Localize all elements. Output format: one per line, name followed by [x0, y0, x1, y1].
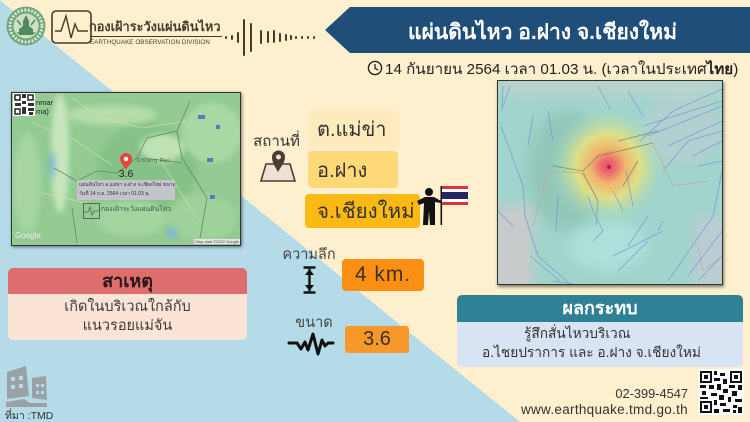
map pin [120, 153, 132, 170]
icon: sound wave [225, 19, 315, 56]
location: subdistrict [308, 110, 399, 147]
intensity map [498, 81, 722, 284]
map terrain [12, 93, 240, 245]
location: subdistrict: ต.แม่ข่า [317, 118, 387, 140]
icon: department seal [6, 6, 46, 46]
map label [36, 98, 53, 116]
source label: ที่มา :TMD [5, 410, 53, 422]
map credit: Map data ©2022 Google [195, 239, 239, 244]
icon: depth arrows [304, 266, 316, 294]
panel: cause [8, 268, 247, 340]
place label: Chiang Rai [137, 158, 169, 164]
icon: seismic wave [288, 332, 334, 356]
magnitude label: 3.6 [119, 168, 133, 180]
location label [253, 130, 300, 182]
logo subtitle [90, 36, 222, 46]
impact text: อ.ไชยปราการ และ อ.ฝาง จ.เชียงใหม่ [482, 345, 701, 360]
title banner [325, 7, 750, 53]
cause text: เกิดในบริเวณใกล้กับ [64, 299, 191, 315]
impact heading: ผลกระทบ [562, 298, 638, 318]
location text: สถานที่ [253, 133, 300, 150]
impact text [482, 324, 701, 360]
map watermark [83, 203, 171, 219]
location: district: อ.ฝาง [317, 160, 367, 182]
icon: clock [368, 60, 382, 76]
logo subtitle: EARTHQUAKE OBSERVATION DIVISION [90, 39, 210, 46]
impact map [497, 80, 723, 285]
depth value: 4 km. [355, 263, 411, 286]
magnitude label: ขนาด [295, 315, 333, 331]
date line [368, 60, 738, 78]
cause heading: สาเหตุ [102, 271, 153, 291]
title: แผ่นดินไหว อ.ฝาง จ.เชียงใหม่ [408, 21, 677, 44]
icon: map pin [260, 150, 296, 182]
map caption: วันที่ 14 ก.ย. 2564 เวลา 01.03 น. [79, 191, 150, 197]
panel: impact [457, 295, 743, 367]
impact heading [457, 295, 743, 322]
magnitude value: 3.6 [363, 328, 391, 350]
location: province [305, 194, 420, 228]
magnitude value [345, 326, 409, 353]
header logo block [6, 6, 315, 56]
cause heading [8, 268, 247, 294]
location: province: จ.เชียงใหม่ [317, 200, 415, 222]
map caption [77, 180, 175, 200]
logo title: กองเฝ้าระวังแผ่นดินไหว [89, 19, 221, 34]
cause text [64, 298, 191, 334]
map qr [13, 93, 35, 116]
map label: ma) [36, 107, 49, 116]
map label: nmar [36, 98, 53, 107]
watermark logo [83, 203, 100, 219]
contact website: www.earthquake.tmd.go.th [521, 402, 688, 417]
icon: seismograph logo [51, 10, 92, 44]
depth value [342, 259, 424, 291]
icon: person with Thai flag [417, 186, 468, 225]
location: district [308, 151, 398, 188]
icon: collapsed building [6, 366, 47, 407]
QR code [698, 369, 744, 415]
contact phone: 02-399-4547 [615, 386, 688, 401]
date text: 14 กันยายน 2564 เวลา 01.03 น. (เวลาในประเทศไทย) [385, 61, 738, 78]
watermark text: กองเฝ้าระวังแผ่นดินไหว [101, 206, 171, 213]
depth label: ความลึก [282, 247, 336, 263]
impact text: รู้สึกสั่นไหวบริเวณ [524, 326, 630, 341]
google mark: Google [15, 231, 41, 240]
map panel [11, 92, 241, 246]
cause text: แนวรอยแม่จัน [83, 318, 172, 334]
